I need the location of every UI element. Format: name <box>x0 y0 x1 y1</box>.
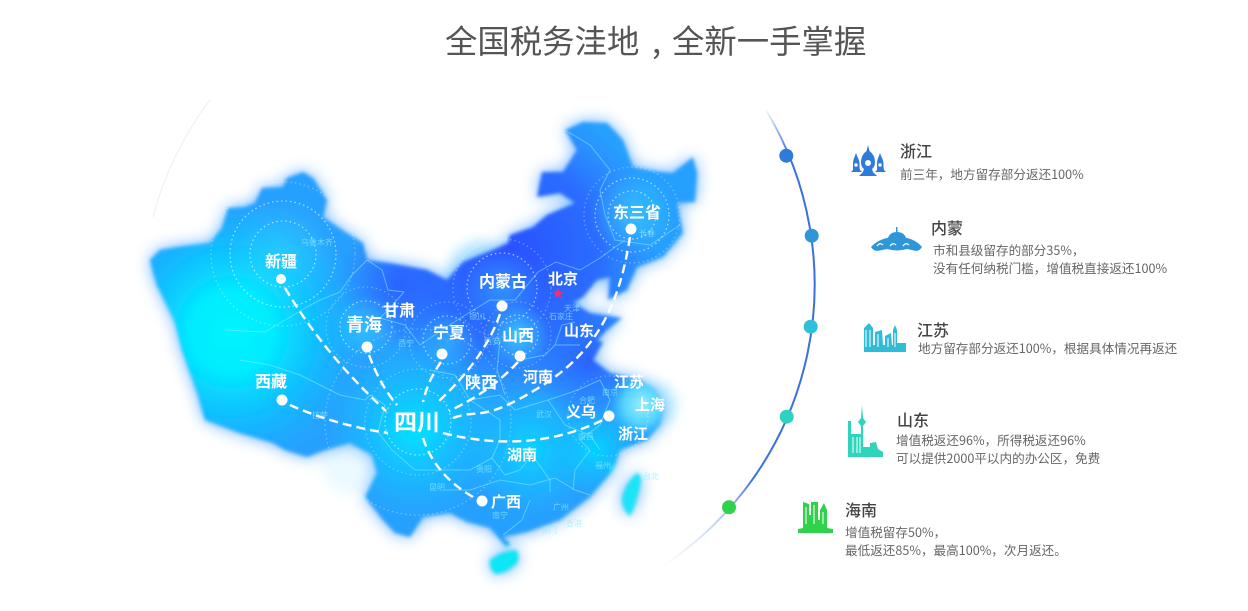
highlight halos <box>228 173 674 370</box>
item: 江苏 <box>864 317 1178 357</box>
item: 内蒙 <box>871 215 1167 277</box>
small city labels: 银川 <box>469 311 485 322</box>
title: 全国税务洼地 <box>445 16 639 63</box>
province labels: 上海 <box>635 394 665 415</box>
description: 增值税返还96%，所得税返还96% <box>896 430 1086 449</box>
icon: skyline <box>864 323 906 352</box>
province labels: 河南 <box>523 366 553 387</box>
small city labels: 乌鲁木齐 <box>301 237 333 248</box>
icon: pagodas <box>851 145 886 176</box>
province labels: 陕西 <box>465 369 497 393</box>
item: 山东: 可以提供2000平以内的办公区，免费 <box>896 448 1100 467</box>
icon: yurt <box>871 227 922 251</box>
small city labels: 长春 <box>639 228 655 239</box>
Beijing star <box>553 288 563 298</box>
description: 地方留存部分返还100%，根据具体情况再返还 <box>918 338 1178 357</box>
province labels: 江苏 <box>614 371 644 392</box>
small city labels: 天津 <box>564 303 580 314</box>
province borders <box>225 130 680 535</box>
faint outer circle <box>153 100 210 217</box>
small city labels: 石家庄 <box>549 311 573 322</box>
map glow <box>150 122 697 574</box>
small city labels: 昆明 <box>429 482 445 493</box>
heading: 海南 <box>845 497 877 521</box>
description: 市和县级留存的部分35%， <box>933 240 1085 259</box>
icon: tower <box>848 405 883 457</box>
small city labels: 西安 <box>484 336 500 347</box>
small city labels: 南昌 <box>578 431 594 442</box>
heading: 浙江 <box>900 138 932 162</box>
province labels: 西藏 <box>255 368 287 392</box>
item: 海南: 最低返还85%，最高100%，次月返还。 <box>845 540 1067 559</box>
province labels: 东三省 <box>613 199 661 223</box>
province labels: 山东 <box>564 320 594 341</box>
province labels: 广西 <box>491 491 521 512</box>
dotted rings <box>230 178 669 455</box>
map fill <box>140 110 710 590</box>
province labels: 青海 <box>346 311 382 337</box>
small city labels: 合肥 <box>579 395 595 406</box>
province labels: 北京 <box>548 268 578 289</box>
province labels: 义乌 <box>566 401 596 422</box>
item: 内蒙: 没有任何纳税门槛，增值税直接返还100% <box>933 258 1167 277</box>
province labels: 甘肃 <box>383 297 415 321</box>
small city labels: 南宁 <box>492 510 508 521</box>
small city labels: 广州 <box>553 502 569 513</box>
province labels: 浙江 <box>618 423 648 444</box>
city dots <box>276 224 636 506</box>
faint outer dotted rings <box>211 167 680 515</box>
small city labels <box>301 228 659 536</box>
small city labels: 武汉 <box>536 409 552 420</box>
province labels: 新疆 <box>265 248 297 272</box>
small city labels: 澳门 <box>541 525 557 536</box>
small city labels: 西宁 <box>398 338 414 349</box>
heading: 江苏 <box>917 317 949 341</box>
item: 浙江 <box>851 138 1084 183</box>
icon: skyline green <box>798 502 833 533</box>
heading: 山东 <box>897 407 929 431</box>
province labels: 内蒙古 <box>479 268 527 292</box>
description: 增值税留存50%， <box>845 522 946 541</box>
small city labels: 台北 <box>643 471 659 482</box>
province labels <box>255 199 665 512</box>
province labels: 四川 <box>394 403 440 437</box>
item: 海南 <box>798 497 1067 559</box>
small city labels: 南京 <box>602 387 618 398</box>
small city labels: 拉萨 <box>312 410 328 421</box>
province labels: 山西 <box>502 322 534 346</box>
small city labels: 贵阳 <box>476 464 492 475</box>
map of China <box>140 110 710 590</box>
province labels: 宁夏 <box>433 319 465 343</box>
title: , <box>652 16 661 63</box>
province labels: 湖南 <box>507 444 537 465</box>
heading: 内蒙 <box>931 215 963 239</box>
timeline dots <box>722 149 819 514</box>
timeline arc <box>650 110 815 574</box>
pale discs outside the outline <box>322 240 677 493</box>
description: 前三年，地方留存部分返还100% <box>900 164 1084 183</box>
dashed flow lines <box>285 237 630 497</box>
item: 山东 <box>848 405 1100 467</box>
small city labels: 香港 <box>566 518 582 529</box>
title: 全新一手掌握 <box>672 16 866 63</box>
small city labels: 福州 <box>595 460 611 471</box>
